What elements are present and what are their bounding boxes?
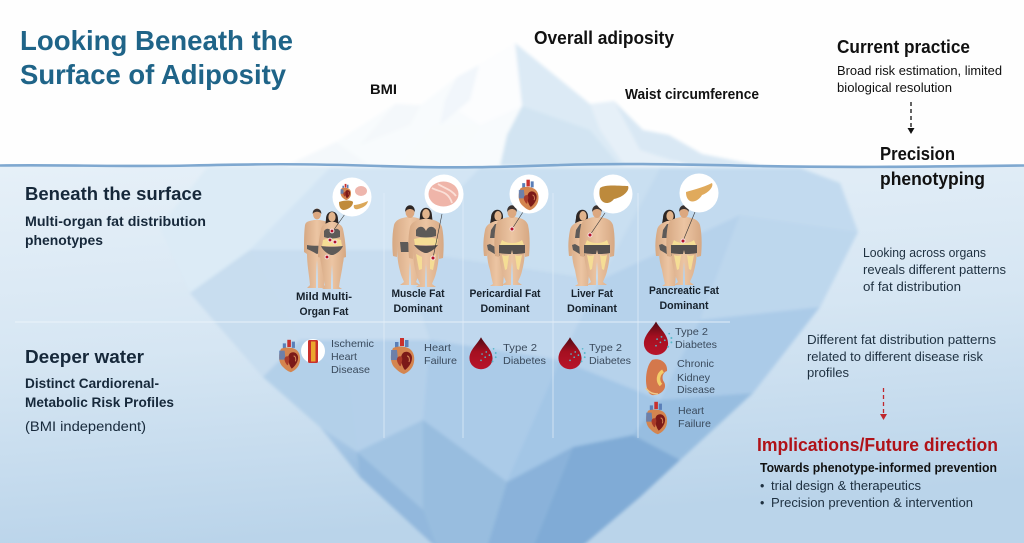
phenotype: pancreatic fat dominant <box>649 174 719 312</box>
heading: precision phenotyping <box>880 144 985 189</box>
text block: looking across organs <box>863 246 1006 294</box>
title: Surface of Adiposity <box>20 59 286 90</box>
text block: implications and future direction: trial design & therapeutics <box>771 479 921 493</box>
text block: different fat distribution patterns: related to different disease risk <box>807 350 984 364</box>
icon: muscle bubble <box>424 174 464 214</box>
text block: implications and future direction: • <box>760 479 764 493</box>
water surface line <box>0 164 1024 167</box>
disease: type 2 diabetes, liver <box>558 337 631 369</box>
icon: liver bubble <box>594 174 632 214</box>
phenotype: pancreatic fat dominant: Pancreatic Fat <box>649 285 719 297</box>
heading: precision phenotyping: phenotyping <box>880 169 985 189</box>
text block: deeper water <box>25 347 174 434</box>
icon: heart bubble <box>510 174 548 214</box>
icon: pancreas bubble <box>680 174 718 212</box>
text block: current practice: Broad risk estimation, limited <box>837 64 1002 78</box>
phenotype: mild multi-organ fat: Organ Fat <box>300 306 349 318</box>
iceberg above water <box>0 43 1024 167</box>
disease: heart failure, muscle: Heart <box>424 342 451 354</box>
label: waist circumference: Waist circumference <box>625 87 759 103</box>
disease: type 2 diabetes, pancreatic <box>644 322 717 355</box>
disease: type 2 diabetes, liver: Diabetes <box>589 355 631 367</box>
text block: implications and future direction: Precision prevention & intervention <box>771 496 973 510</box>
phenotype: pericardial fat dominant: Pericardial Fat <box>470 288 541 300</box>
disease: type 2 diabetes, pancreatic: Diabetes <box>675 339 717 351</box>
text block: implications and future direction: Towards phenotype-informed prevention <box>760 461 997 475</box>
label: overall adiposity: Overall adiposity <box>534 28 674 48</box>
phenotype: muscle fat dominant <box>392 174 464 315</box>
text block: deeper water: Distinct Cardiorenal- <box>25 376 159 391</box>
disease: chronic kidney disease: Chronic <box>677 358 714 370</box>
heading: precision phenotyping: Precision <box>880 144 955 164</box>
text block: implications and future direction: Implications/Future direction <box>757 435 998 455</box>
text block: deeper water: Metabolic Risk Profiles <box>25 395 174 410</box>
text block: implications and future direction: • <box>760 496 764 510</box>
arrow: risk profiles to implications <box>880 388 887 420</box>
disease: heart failure, pancreatic: Failure <box>678 418 711 430</box>
disease: ischemic heart disease: Disease <box>331 364 370 376</box>
phenotype: pericardial fat dominant <box>470 174 548 315</box>
disease: type 2 diabetes, liver: Type 2 <box>589 342 622 354</box>
phenotype: muscle fat dominant: Muscle Fat <box>392 288 445 300</box>
phenotype: pancreatic fat dominant: Dominant <box>660 300 709 312</box>
disease: ischemic heart disease <box>279 338 374 376</box>
text block: deeper water: (BMI independent) <box>25 419 146 434</box>
text block: beneath the surface: Beneath the surface <box>25 184 202 204</box>
disease: heart failure, muscle: Failure <box>424 355 457 367</box>
text block: current practice: Current practice <box>837 37 970 57</box>
text block: looking across organs: reveals different patterns <box>863 263 1006 277</box>
text block: current practice: biological resolution <box>837 81 952 95</box>
text block: implications and future direction <box>757 435 998 510</box>
text block: beneath the surface: Multi-organ fat distribution <box>25 214 206 229</box>
disease: ischemic heart disease: Heart <box>331 351 357 363</box>
text block: different fat distribution patterns <box>807 333 996 380</box>
phenotype: pericardial fat dominant: Dominant <box>480 303 530 315</box>
label: BMI: BMI <box>370 81 397 97</box>
title: Looking Beneath the <box>20 25 293 56</box>
arrow: current practice to precision phenotyping <box>908 102 914 134</box>
disease: heart failure, pancreatic: Heart <box>678 405 704 417</box>
disease: chronic kidney disease: Kidney <box>677 372 711 384</box>
phenotype: liver fat dominant: Liver Fat <box>571 288 613 300</box>
iceberg below water <box>160 168 858 543</box>
phenotype: mild multi-organ fat <box>296 178 372 318</box>
text block: looking across organs: of fat distribution <box>863 280 961 294</box>
disease: type 2 diabetes, pericardial: Type 2 <box>503 342 537 354</box>
disease: chronic kidney disease <box>646 358 715 396</box>
disease: ischemic heart disease: Ischemic <box>331 338 374 350</box>
phenotype: muscle fat dominant: Dominant <box>394 303 443 315</box>
disease: chronic kidney disease: Disease <box>677 384 715 396</box>
text block: different fat distribution patterns: Different fat distribution patterns <box>807 333 996 347</box>
phenotype: mild multi-organ fat: Mild Multi- <box>296 291 352 303</box>
text block: beneath the surface <box>25 184 206 248</box>
text block: beneath the surface: phenotypes <box>25 233 103 248</box>
disease: type 2 diabetes, pericardial <box>469 337 546 369</box>
disease: heart failure, muscle <box>391 338 457 374</box>
text block: deeper water: Deeper water <box>25 347 144 367</box>
text block: different fat distribution patterns: profiles <box>807 366 849 380</box>
text block: looking across organs: Looking across organs <box>863 246 986 260</box>
phenotype: liver fat dominant <box>567 174 632 315</box>
title <box>20 25 293 90</box>
text block: current practice <box>837 37 1002 95</box>
disease: type 2 diabetes, pericardial: Diabetes <box>503 355 546 367</box>
disease: type 2 diabetes, pancreatic: Type 2 <box>675 326 708 338</box>
phenotype: liver fat dominant: Dominant <box>567 303 617 315</box>
icon: four organs bubble <box>332 178 372 216</box>
disease: heart failure, pancreatic <box>646 402 711 434</box>
